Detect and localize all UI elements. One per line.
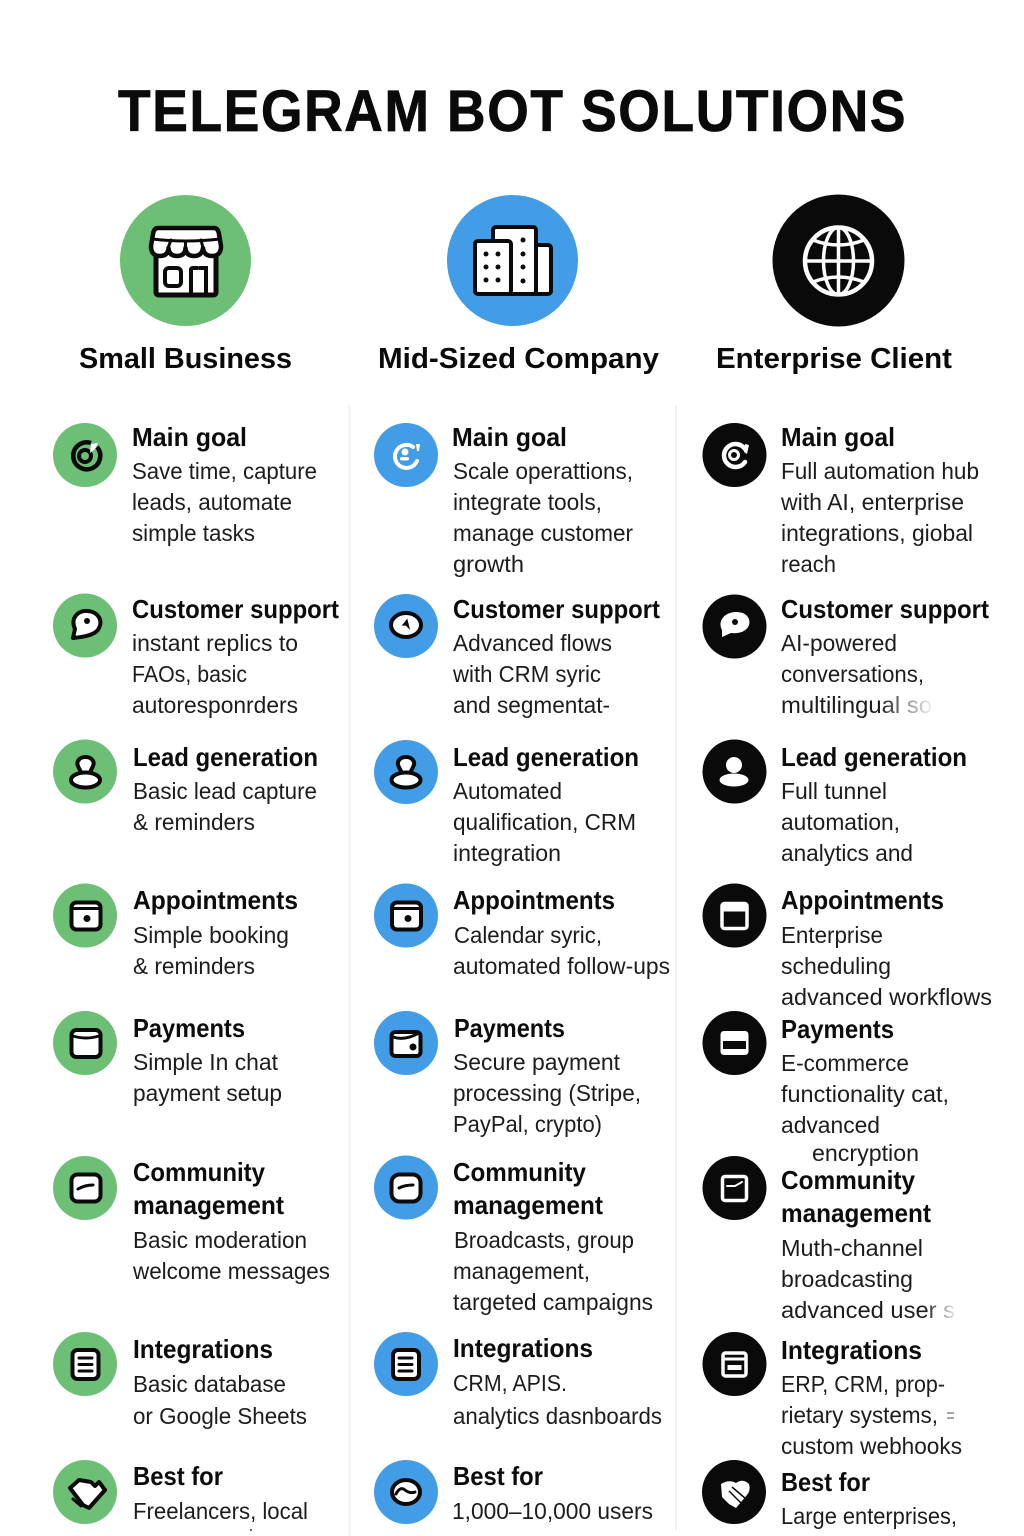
icon: wallet [374, 1011, 438, 1075]
text block: broadcasting [781, 1266, 913, 1292]
text block: management, [453, 1258, 590, 1284]
icon: calendar [702, 884, 766, 948]
text block: targeted campaigns [453, 1289, 653, 1315]
text block: Best for [781, 1467, 870, 1497]
text block [452, 594, 660, 718]
text block: simple tasks [132, 520, 255, 546]
text block: Appointments [453, 885, 615, 915]
icon: message box [702, 1156, 766, 1220]
text block: multilingual so [781, 692, 932, 718]
text block [453, 885, 670, 979]
column heading: Small Business [79, 343, 292, 375]
text block: analytics dasnboards [453, 1403, 662, 1429]
icon: wallet [53, 1011, 117, 1075]
text block: manage customer [453, 520, 633, 546]
icon: speech bubble [702, 594, 766, 658]
column heading: Mid-Sized Company [378, 343, 659, 375]
text block: & reminders [133, 809, 255, 835]
text block: leads, automate [132, 489, 292, 515]
text block [453, 1157, 653, 1315]
row: appointments [53, 884, 298, 979]
icon: office buildings [447, 195, 578, 326]
row: integrations [53, 1332, 307, 1429]
text block: management [781, 1198, 931, 1228]
text block: scheduling [781, 953, 891, 979]
text block [133, 1461, 308, 1531]
text block: CRM, APIS. [453, 1370, 567, 1396]
text block: 1,000–10,000 users [452, 1498, 653, 1524]
text block: custom webhooks [781, 1433, 962, 1459]
icon: handshake [702, 1460, 766, 1524]
text block [132, 422, 317, 546]
text block: Community [453, 1157, 587, 1187]
text block [453, 742, 639, 866]
text block: Full automation hub [781, 458, 979, 484]
text block: Community [781, 1165, 916, 1195]
row: appointments [702, 884, 992, 1010]
text block: Basic database [133, 1371, 286, 1397]
text block: Appointments [781, 885, 944, 915]
text block [452, 1461, 653, 1524]
icon: handshake [53, 1460, 117, 1524]
row: community management [374, 1156, 653, 1315]
text block: integrations, giobal [781, 520, 973, 546]
text block: Integrations [453, 1333, 593, 1363]
row: main goal [374, 422, 633, 577]
text block: advanced [781, 1112, 880, 1138]
text block: or Google Sheets [133, 1403, 307, 1429]
icon: calendar [53, 884, 117, 948]
text block [781, 594, 989, 718]
text block: with CRM syric [452, 661, 601, 687]
row: best for [374, 1460, 653, 1524]
text block: analytics and [781, 840, 913, 866]
panel: enterprise client [702, 194, 992, 1529]
text block: with AI, enterprise [780, 489, 964, 515]
text block: & reminders [133, 953, 255, 979]
text block [780, 422, 979, 577]
text block: Calendar syric, [454, 922, 602, 948]
icon: speech bubble [53, 594, 117, 658]
text block [133, 1013, 282, 1106]
text block: Integrations [781, 1335, 922, 1365]
text block: Best for [133, 1461, 223, 1491]
text block: Secure payment [453, 1049, 621, 1075]
icon: person [702, 740, 766, 804]
text block: welcome messages [132, 1258, 330, 1284]
icon: storefront [120, 195, 251, 326]
text block: Broadcasts, group [454, 1227, 634, 1253]
text block: rietary systems, [781, 1402, 938, 1428]
row: customer support [374, 594, 660, 718]
row: appointments [374, 884, 670, 979]
text block [781, 885, 992, 1010]
column heading: Enterprise Client [716, 343, 952, 375]
text block: E-commerce [781, 1050, 909, 1076]
text block: reach [781, 551, 836, 577]
text block: Lead generation [781, 742, 967, 772]
text block [781, 742, 967, 866]
text block: Customer support [132, 594, 339, 624]
text block: FAOs, basic [132, 661, 247, 687]
text block: Advanced flows [453, 630, 612, 656]
icon: message box [53, 1156, 117, 1220]
text block: payment setup [133, 1080, 282, 1106]
text block: Simple booking [133, 922, 289, 948]
row: community management [53, 1156, 330, 1284]
text block: management [133, 1190, 284, 1220]
text block: Payments [781, 1014, 894, 1044]
text block: advanced workflows [781, 984, 992, 1010]
text block: instant replics to [132, 630, 298, 656]
text block [132, 1157, 330, 1284]
text block: conversations, [781, 661, 924, 687]
text block [133, 885, 298, 979]
text block: Main goal [781, 422, 895, 452]
text block: Scale operattions, [453, 458, 633, 484]
icon: calendar [374, 884, 438, 948]
row: best for [702, 1460, 957, 1529]
text block: Best for [453, 1461, 543, 1491]
text block: Main goal [132, 422, 247, 452]
row: lead generation [702, 740, 967, 866]
text block: advanced user s [781, 1297, 955, 1323]
text block: PayPal, crypto) [453, 1111, 602, 1137]
icon: credit card [702, 1011, 766, 1075]
icon: message box [374, 1156, 438, 1220]
panel: mid-sized company [374, 195, 670, 1524]
text block: Automated [453, 778, 562, 804]
text block: processing (Stripe, [453, 1080, 641, 1106]
row: integrations [702, 1332, 962, 1459]
row: best for [53, 1460, 308, 1531]
text block: Community [133, 1157, 265, 1187]
text block: and segmentat- [453, 692, 610, 718]
text block: Integrations [133, 1334, 273, 1364]
text block [781, 1467, 957, 1529]
text block [781, 1165, 955, 1323]
text block: Lead generation [133, 742, 318, 772]
text block: automation, [781, 809, 900, 835]
text block: automated follow-ups [453, 953, 670, 979]
row: main goal [53, 422, 317, 546]
text block [133, 1334, 307, 1429]
icon: server window [702, 1332, 766, 1396]
text block: Main goal [452, 422, 567, 452]
icon: target [53, 423, 117, 487]
row: community management [702, 1156, 955, 1323]
text block: Large enterprises, [781, 1503, 957, 1529]
text block: Enterprise [781, 922, 883, 948]
row: lead generation [53, 740, 318, 835]
icon: globe [772, 194, 904, 326]
text block: Basic lead capture [133, 778, 317, 804]
text block [781, 1335, 962, 1459]
text block: Simple In chat [133, 1049, 279, 1075]
icon: document [374, 1332, 438, 1396]
text block: Appointments [133, 885, 298, 915]
text block: Full tunnel [781, 778, 887, 804]
icon: speech bubble [374, 594, 438, 658]
text block: Freelancers, local [133, 1498, 308, 1524]
text block: ERP, CRM, prop- [781, 1371, 945, 1397]
row: payments [702, 1011, 949, 1166]
icon: gauge [374, 1460, 438, 1524]
text block: integration [453, 840, 561, 866]
icon: person [374, 740, 438, 804]
text block: Save time, capture [132, 458, 317, 484]
title: TELEGRAM BOT SOLUTIONS [118, 79, 906, 143]
row: payments [53, 1011, 282, 1106]
text block: management [453, 1190, 603, 1220]
text block [133, 742, 318, 835]
text block: functionality cat, [781, 1081, 949, 1107]
text block: integrate tools, [453, 489, 602, 515]
panel: small business [53, 195, 339, 1531]
text block [453, 1013, 641, 1137]
text block: Lead generation [453, 742, 639, 772]
text block: qualification, CRM [453, 809, 636, 835]
icon: target [374, 423, 438, 487]
row: customer support [702, 594, 989, 718]
text block: autoresponrders [132, 692, 298, 718]
icon: person [53, 740, 117, 804]
row: payments [374, 1011, 641, 1137]
text block: Customer support [781, 594, 989, 624]
row: customer support [53, 594, 339, 718]
text block: encryption [812, 1140, 919, 1166]
icon: target [702, 423, 766, 487]
text block: AI-powered [781, 630, 897, 656]
text block: Basic moderation [133, 1227, 307, 1253]
text block [781, 1014, 949, 1166]
text block: growth [453, 551, 524, 577]
text block: Muth-channel [781, 1235, 923, 1261]
text block: Payments [454, 1013, 565, 1043]
text block: Customer support [453, 594, 660, 624]
icon: document [53, 1332, 117, 1396]
row: main goal [702, 422, 979, 577]
text block [453, 1333, 662, 1429]
text block: Payments [133, 1013, 245, 1043]
row: lead generation [374, 740, 639, 866]
text block [452, 422, 633, 577]
text block [132, 594, 339, 718]
row: integrations [374, 1332, 662, 1429]
